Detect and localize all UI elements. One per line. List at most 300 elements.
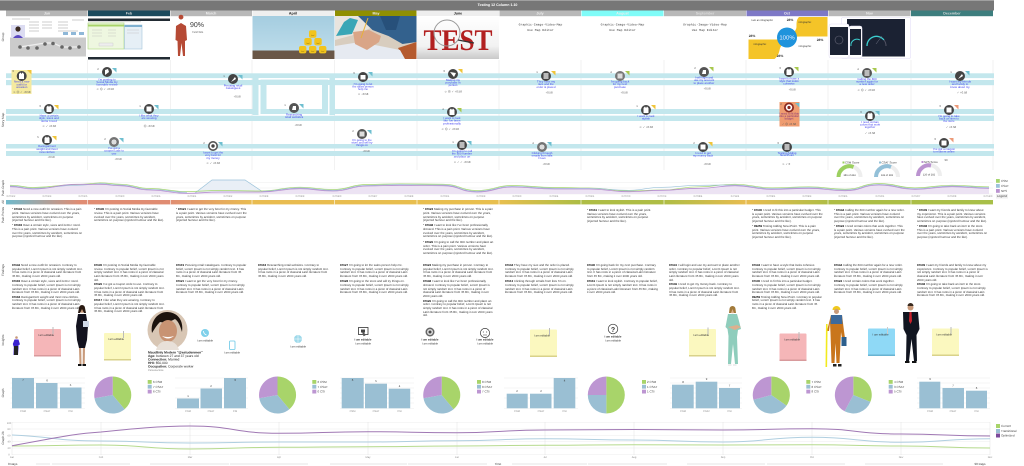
bar chart 6: CSAT [950,410,957,413]
sticky note: yellow Dec [932,327,959,356]
journey node: Oct top: style that looks [779,79,799,83]
pain graph: 07/09/6 [839,195,848,198]
journey node: row 3 c: 2 [203,141,205,145]
pain graph legend [996,179,1009,198]
journey node: highlighted orange note: 2 [780,102,782,106]
pie chart 2 [259,376,296,414]
gauge: CSAT score: 119 of 282 [881,174,894,177]
journey node: Aug top: purchase [614,85,626,89]
pain graph: 07/06/4 [550,195,559,198]
journey node: July row 3: emails from lists [532,154,553,158]
bar chart 5: CSM [680,410,686,413]
icon: phone call [197,329,213,342]
journey node: Oct top: I want to have a [779,76,800,80]
journey node: July row 3: 4 [532,141,534,145]
month header row: April [289,12,297,16]
journey node: row 3 e: I'm going to call [452,149,472,153]
journey node: Aug top: +0.58 [620,90,628,94]
finding: April 1: 87618 Researching retail websites. Contrary to popular belief, Lorem Ipsum is not simply random text. It has roots in a piece of classical Latin literature from 45 BC, making it over 2000 years old. [258,263,329,278]
image: Oct 100% infographic: infographic [799,45,812,48]
image: June TEST word: TEST [424,24,492,57]
experience curve chart: 40 [8,441,11,444]
figure: construction worker [826,306,846,367]
journey node: Sept top: to place another [694,81,714,85]
row labels: Pain Graph [1,180,5,196]
bar chart 6: CSI [974,410,979,413]
journey node: purchase: purchase in [446,80,461,84]
experience curve chart: 0 [8,453,10,456]
journey node: Sept row 3: +0.58 [703,162,711,166]
experience curve chart [7,422,993,459]
pie legend 5: 8 CSI [812,390,819,394]
image placeholders: July to September [519,22,727,32]
journey node: Oct row 3: New iPoint [780,153,794,157]
experience curve chart: Oct [810,456,814,459]
journey node: Oct top: cohesive [783,82,795,86]
gauge: CSM score [838,160,860,177]
bar chart 1: 7 [22,378,24,382]
pain graph [7,180,993,198]
pie chart 1 [94,376,131,414]
icon: neutral face: I am editable [477,342,493,346]
journey node: row 2 b: are wearing [141,116,157,120]
bar chart 3: 6 [352,378,354,382]
icon: monitor with hand: I am editable [355,342,371,346]
persona details [148,350,203,372]
journey node: row 2 a: 3 [39,104,41,108]
pie legend 4: 2 CSM [647,380,657,384]
sticky note: yellow July [530,328,557,357]
journey node: row 3 c: very best for [205,153,221,157]
icon: question mark: I am editable [605,338,621,342]
journey node: July row 3: I have [538,156,546,160]
journey node: row 2 a: style, sizes and [39,116,59,120]
image: Oct 100% infographic: 100% [779,34,795,42]
pain graph: 07/01/3 [43,195,52,198]
gauge: NPS score: NPS Score [924,160,938,164]
pain point: Feb: * 87645 I'm posting to Social Media my favorable review. This is a pain point. Various versions have evolved over the years, sometimes by accident, sometimes on purpose (injected humour and the like). [94,207,164,222]
row labels: All [1,200,5,204]
journey node: Aug row 2: 1 [636,104,638,108]
curve chart legend [996,424,1017,438]
bar chart 5: 9 [706,377,708,381]
bar chart 4: 4 [564,378,566,382]
journey node: purchase [443,69,462,94]
pie legend 5: 7 CSM [812,380,821,384]
bar chart 3: CSM [350,410,355,413]
image: Oct 100% infographic: 28% [817,38,823,42]
journey node: highlighted orange note [779,102,800,126]
finding: Jan 3: 87694 Hard-garment weight and meet new clothes. Contrary to popular belief, Lorem Ipsum is not simply random text. It has roots in a piece of classical Latin literature from 45 BC, making it over 2000 years old. [12,295,81,310]
finding: July 2: 87613 Clicking through emails from lists I'm on. Contrary to popular belief, Lorem Ipsum is not simply random text. It has roots in a piece of classical Latin literature from 45 BC, making it over 2000 years old. [505,279,574,294]
journey node: row 3 c [203,141,224,165]
pain graph legend: Legend [997,194,1007,198]
pain point: Nov first: * 87644 Calling the 800 number again for a new order. This is a pain point. Various versions have evolved over the years, sometimes by accident, sometimes on purpose (injected humour and the like). [834,208,905,223]
pain graph legend: CSAT [1001,184,1009,188]
pain graph: 07/10/1 [876,195,885,198]
pie legend 3: 8 CSAT [482,385,492,389]
journey node: Oct top: 3 [779,66,781,70]
journey node: Sept top: +0.58 [703,86,711,90]
finding: Jan 1: 87642 Need a new outfit for occasion. Contrary to popular belief, Lorem Ipsum is not simply random text. It has roots in a piece of classical Latin literature from 45 BC, making it over 2000 years old. [12,263,83,278]
journey node: highlighted yellow note: occasion [16,85,28,89]
figure: small blue person [13,336,20,355]
image: May student writing [335,16,416,59]
image placeholders: July to September: Use Map Editor [609,28,636,32]
gauge: NPS score: 120 of 282 [923,174,936,176]
journey node: row 2 b: I like what they [139,114,159,118]
bar chart 1: CSM [20,410,26,413]
journey node: row 3 e: and place an [454,154,471,158]
image: Oct 100% infographic: 28% [787,18,793,22]
pain graph: 07/01/5 [79,195,88,198]
finding: Jan 2: 87693 Have a certain style, sizes and items I need. Contrary to popular belief, Lorem Ipsum is not simply random text. It has roots in a piece of classical Latin literature from 45 BC, making it over 2000 years old. [12,279,81,294]
experience curve chart: 100 [7,422,12,425]
experience curve chart: 20 [8,447,11,450]
journey node: sales person: the sales person [352,84,374,88]
journey node: Sept top: 2 [694,66,696,70]
journey node: Dec top: know about my [950,85,970,89]
bar chart 5: CSI [727,410,732,413]
icon: neutral face: I am editable [477,338,494,342]
journey node: Aug top [610,70,630,94]
journey node: Aug row 2: ☺ ✓ +0.58 [639,125,653,129]
pie legend 6: 5 CSI [894,390,902,394]
journey node: row 2 d: I want to look [443,116,461,120]
journey node: row 3 b [104,137,124,161]
pie chart 6 [835,376,872,413]
journey node: sales person: ☺ +0.58 [358,92,369,96]
experience curve chart: Jan [10,456,15,459]
sticky note: yellow Sept: I am editable [693,333,709,337]
row labels: Pain Points [1,207,5,223]
image placeholders: July to September: Graphic-Image-Video-Map [601,22,644,26]
journey node: row 2 a: ☺ ✓ +0.58 [42,124,56,128]
journey node: row 3 a: +0.58 [47,155,55,159]
image: April emoji pyramid [252,16,334,59]
time axis with range markers: 0 Days [8,462,18,466]
icon: target: I am editable [422,342,438,346]
journey node: Dec top: I want my friends [949,80,971,84]
image: March 90% person: 90% [190,22,204,29]
time axis with range markers [8,462,986,466]
journey node: sales person: I'm going to let [354,82,373,86]
pie chart 4 [588,376,625,414]
month header row: Oct [784,12,791,16]
bar chart 4: 2 [516,389,518,393]
image: Oct 100% infographic: infographic [754,43,767,46]
journey node: Nov row 2 [860,110,881,135]
journey node: row 2 c: 1 [284,103,286,107]
icon: globe: I am editable [290,344,306,348]
journey node: Dec row 3 [933,137,955,162]
image: March 90% person: TESTING [192,31,203,34]
month header row: March [206,12,216,16]
pain graph legend: NPS [1001,189,1007,193]
pain point: June third: * 87626 I'm going to call the 800 number and place an order. This is a pain point. Various versions have evolved over the years, sometimes by accident, sometimes on purpose (injected humour and the like). [423,240,493,255]
journey node: Dec row 3: 3 [934,137,936,141]
pie legend 2: 7 CSAT [318,385,328,389]
journey swimlane bands [6,73,994,156]
journey node: Nov top: number again for [856,80,878,84]
bar chart 1: CSI [68,410,73,413]
journey node: Sept top [694,66,714,90]
month header row [6,10,993,16]
persona details: Maudlinly Modern "@estudenmen" [148,350,203,354]
journey node: row 2 d: ☺ ☹ ✓ +0.58 [441,127,459,131]
pain graph: 07/05/9 [477,195,486,198]
image: Nov dashboard devices [829,18,910,58]
journey node: purchase: person [449,83,458,87]
bar chart 6: CSM [927,410,933,413]
journey node: Nov row 2: colors that work [860,122,881,126]
month header row: June [454,12,462,16]
finding: Dec 2: 87638 I'm going to take back an item to the store. Contrary to popular belief, Lorem Ipsum is not simply random text. It has roots in a piece of classical Latin literature from 45 BC, making it over 2000 years old. [917,282,986,297]
header bar [0,0,994,10]
finding: Oct 1: 87643 I want to have a style that looks cohesive. Contrary to popular belief, Lorem Ipsum is not simply random text. It has roots in a piece of classical Latin literature from 45 BC, making it over 2000 years old. [752,263,821,278]
curve chart legend: Transitional [1001,429,1017,433]
pain point: Jan second: * 87693 Have a certain style, sizes and items I need. This is a pain point. Various versions have evolved over the years, sometimes by accident, sometimes on purpose (injected humour and the like). [12,223,82,238]
journey node: Dec row 3: I've got a coupon [933,147,955,151]
journey node: Oct row 3: 3 [777,141,779,145]
pain graph: 07/03/1 [188,195,197,198]
journey node: Aug top: 4 [610,70,612,74]
pie legend 3: 8 CSM [482,380,492,384]
finding: Sept 1: 87641 I will login and use my account to place another order. Contrary to popular belief, Lorem Ipsum is not simply random text. It has roots in a piece of classical Latin literature from 45 BC, making it over 2000 years old. [669,263,740,282]
journey node: row 3 a: 5 [37,135,39,139]
persona details: HHI: $50,000 [148,361,168,365]
pain graph: 07/06/1 [586,195,595,198]
journey node: Sept row 3: 2 [693,141,695,145]
bar chart 2: CSM [185,410,191,413]
pain point: August: * 87616 I want to look stylish. This is a pain point. Various versions have evolved over the years, sometimes by accident, sometimes on purpose (injected humour and the like). [587,208,651,223]
journey node: row 2 b [139,104,159,128]
journey node: row 3 c: ☺ ✓ +0.58 [206,161,220,165]
pain graph: 07/08/4 [694,195,703,198]
sticky note: pink Oct: I am editable [784,338,800,342]
bar chart 6: 6 [976,386,978,390]
pie legend 4 [642,380,657,394]
image: Oct 100% infographic: 28% [749,34,755,38]
icon: globe [290,335,306,348]
journey node: Dec row 2: the store [943,119,955,123]
sticky note: yellow [104,331,131,360]
pain graph: 07/11/3 [731,195,740,198]
finding: June 1: 87623 Making my purchase in person. Contrary to popular belief, Lorem Ipsum is not simply random text. It has roots in a piece of classical Latin literature from 45 BC, making it over 2000 years old. [423,263,494,278]
icon: smartphone: I am editable [224,350,240,354]
journey node: highlighted yellow note: outfit for [16,82,27,86]
journey node: Oct row 3: ☺ ✓ 0 [782,162,791,166]
journey node: highlighted orange note: into a particular [779,114,799,118]
journey node: row 3 b: use [112,152,117,156]
bar chart 6: 7 [952,384,954,388]
icon: smartphone [224,341,240,354]
journey node: July row 3: Clicking through [532,151,553,155]
journey node: row 3 b: I've got a [108,146,120,150]
row labels: Group [1,32,5,41]
journey node: Dec top: ✓ +0.58 [957,90,968,94]
pie legend 2 [312,380,328,394]
journey node: July row 3 [532,141,553,166]
journey node: Aug row 2: I want to look [637,114,655,118]
month header row: December [943,12,961,16]
header bar: Testing 12 Column 1.10 [478,3,517,7]
pain graph legend: CSM [1001,179,1008,183]
month header row: July [536,12,544,16]
finding: Oct 2: 87630 I need to fit this into a particular budget. Contrary to popular belief, Lorem Ipsum is not simply random text. It has roots in a piece of classical Latin literature from 45 BC, making it over 2000 years old. [752,279,821,294]
journey node: social media: I'm posting to [98,78,116,82]
journey node: row 3 b: +0.58 [114,157,122,161]
journey node: row 3 b: coupon code to [104,148,124,152]
journey node: row 2 d: 4 [442,107,444,111]
icon: neutral face [477,328,494,346]
experience curve chart: 80 [8,428,11,431]
time axis with range markers: 90 Days [974,462,986,466]
pain graph: 07/09/1 [767,195,776,198]
journey node: row 3 a [36,135,58,159]
figure: woman in black dress [76,305,89,366]
experience curve chart: Mar [188,456,192,459]
journey node: July top: 1 [536,70,538,74]
experience curve chart: Sep [721,456,726,459]
gauge: CSM score: CSM Score [845,160,860,164]
month header row: Jan [44,12,50,16]
journey node: highlighted yellow note: 3 [12,69,14,73]
icon: phone call: I am editable [197,338,213,342]
image: Oct 100% infographic: I am an infographic [751,19,774,22]
journey node: July top: size and the [538,82,554,86]
bar chart 2 [175,378,248,413]
journey node: row 2 d: professionally [443,122,461,126]
journey node: row 2 b: ☹ +0.58 [144,124,155,128]
journey node: sales person [352,71,374,96]
pain point: June first: * 87623 Making my purchase in person. This is a pain point. Various versions have evolved over the years, sometimes by accident, sometimes on purpose (injected humour and the like). [423,207,493,222]
bar chart 2: 3 [234,378,236,382]
journey node: highlighted orange note: I need to fit this [779,112,799,116]
pain graph: 07/04/7 [369,195,378,198]
journey node: row 3 d: things on [356,143,368,147]
curve chart legend: Optimized [1001,434,1015,438]
journey node: highlighted orange note: budget [785,116,794,120]
image: Oct 100% infographic [748,17,828,59]
pie legend 1 [148,380,163,394]
finding: Feb 2: 87626 I've got a coupon code to use. Contrary to popular belief, Lorem Ipsum is not simply random text. It has roots in a piece of classical Latin literature from 45 BC, making it over 2000 years old. [94,282,165,297]
journey node: catalogues: 1 [223,74,225,78]
row labels: Story Map [1,113,5,127]
journey node: July top: They have my [537,80,556,84]
journey node: Sept row 3: I need to get [695,151,711,155]
journey node: Dec row 2: 3 [939,104,941,108]
gauge: CSAT score [876,160,898,177]
sticky note: pink: I am editable [38,333,54,337]
image: Oct 100% infographic: infographic [799,21,812,24]
journey node: Aug row 2 [636,104,656,129]
time axis with range markers: Time [495,462,502,466]
journey node: purchase: 3 [443,69,445,73]
journey node: Oct top [779,66,800,92]
journey node: row 2 c: +0.58 [294,123,302,127]
experience curve chart: Feb [99,456,104,459]
sticky note: yellow Dec: I am editable [936,332,952,336]
pie legend 6: 3 CSAT [894,385,904,389]
journey node: Dec row 3: 99 [944,158,948,162]
persona details: Occupation: Corporate worker [148,364,195,368]
pain point: Dec second: * 87638 I'm going to take back an item to the store. This is a pain point. Various versions have evolved over the years, sometimes by accident, sometimes on purpose (injected humour and the like). [917,224,987,239]
finding: Aug 2: 87616 I want to look stylish. Contrary to popular belief, Lorem Ipsum is not simply random text. It has roots in a piece of classical Latin literature from 45 BC, making it over 2000 years old. [587,279,658,294]
image: Oct 100% infographic: 28% [777,54,783,58]
journey node: row 3 e: 1 [452,140,454,144]
journey node: row 2 a: Have a certain [40,114,59,118]
pie legend 3 [477,380,492,394]
pain graph: 07/05/1 [441,195,450,198]
journey node: sales person: help me [358,87,369,91]
image placeholders: July to September: Use Map Editor [692,28,718,32]
finding: Oct 3: 89259 Testing Adding New iPoint. Contrary to popular belief, Lorem Ipsum is not simply random text. It has roots in a piece of classical Latin literature from 45 BC, making it over 2000 years old. [752,295,822,310]
pie legend 1: 6 CSM [153,380,163,384]
pie legend 1: 7 CSAT [153,385,163,389]
journey node: Dec top: 1 [950,70,952,74]
experience curve chart: Apr [277,456,281,459]
journey node: row 3 e: the 800 number [452,152,472,156]
persona portrait [148,310,188,350]
gauge: CSAT score: CSAT Score [882,160,897,164]
journey node: row 3 e: ☺ ✓ ✓ +0.58 [454,160,471,164]
journey node: row 3 d: I'm going to the [352,138,372,142]
bar chart 3 [340,378,414,413]
pain graph: 07/03/9 [296,195,305,198]
image: June TEST word [417,16,499,59]
sticky note: pink [34,327,61,356]
pie chart 5 [753,376,790,414]
sticky note: blue [868,327,895,356]
pie legend 5 [806,380,822,394]
journey node: row 2 b: 1 [139,104,141,108]
journey node: July top [536,70,556,94]
persona details: Connection: Married [148,358,179,362]
journey node: row 3 d: store and will try [352,140,373,144]
journey node: row 2 c [284,103,304,127]
pie chart 3 [423,376,460,414]
finding: June 2: 87648 I want to look like I've been professionally dressed. Contrary to popular belief, Lorem Ipsum is not simply random text. It has roots in a piece of classical Latin literature from 45 BC, making it over 2000 years old. [423,279,490,298]
finding: March 1: 87619 Perusing retail Catalogues. Contrary to popular belief, Lorem Ipsum is not simply random text. It has roots in a piece of classical Latin literature from 45 BC, making it over 2000 years old. [176,263,246,278]
journey node: July row 3: +0.58 [542,162,550,166]
bar chart 4: CSAT [538,410,545,413]
bar chart 3: 5 [375,379,377,383]
sticky note: blue: I am editable [872,332,889,336]
month header row: Feb [126,12,133,16]
journey node: row 3 d [352,129,373,153]
finding: Sept 2: 87636 I need to get my money back. Contrary to popular belief, Lorem Ipsum is not simply random text. It has roots in a piece of classical Latin literature from 45 BC, making it over 2000 years old. [669,282,740,297]
pain graph: 07/04/8 [405,195,414,198]
row labels: Graph [1,388,5,397]
experience curve chart: Dec [988,456,993,459]
persona details: Persona Size [148,369,164,372]
journey node: purchase: Making my [446,78,461,82]
icon: question mark: ? [611,327,615,334]
finding: July 1: 87634 They have my size and the order is placed. Contrary to popular belief, Lorem Ipsum is not simply random text. It has roots in a piece of classical Latin literature from 45 BC, making it over 2000 years old. [505,263,574,278]
pain graph: 07/09/3 [803,195,812,198]
journey node: Aug row 2: stylish [642,116,650,120]
icon: monitor with hand [355,328,372,346]
journey column grid [88,60,993,170]
curve chart legend: Current [1001,424,1011,428]
bar chart 4: CSI [562,410,567,413]
pie legend 4: 1 CSI [647,390,655,394]
journey node: highlighted yellow note: ☺ ☹ ✓ +0.58 [13,90,31,94]
journey node: row 2 a: items I need [41,119,57,123]
pain graph: 07/07/3 [658,195,667,198]
journey node: highlighted orange note: ✓ ☹ +0.58 [782,122,796,126]
